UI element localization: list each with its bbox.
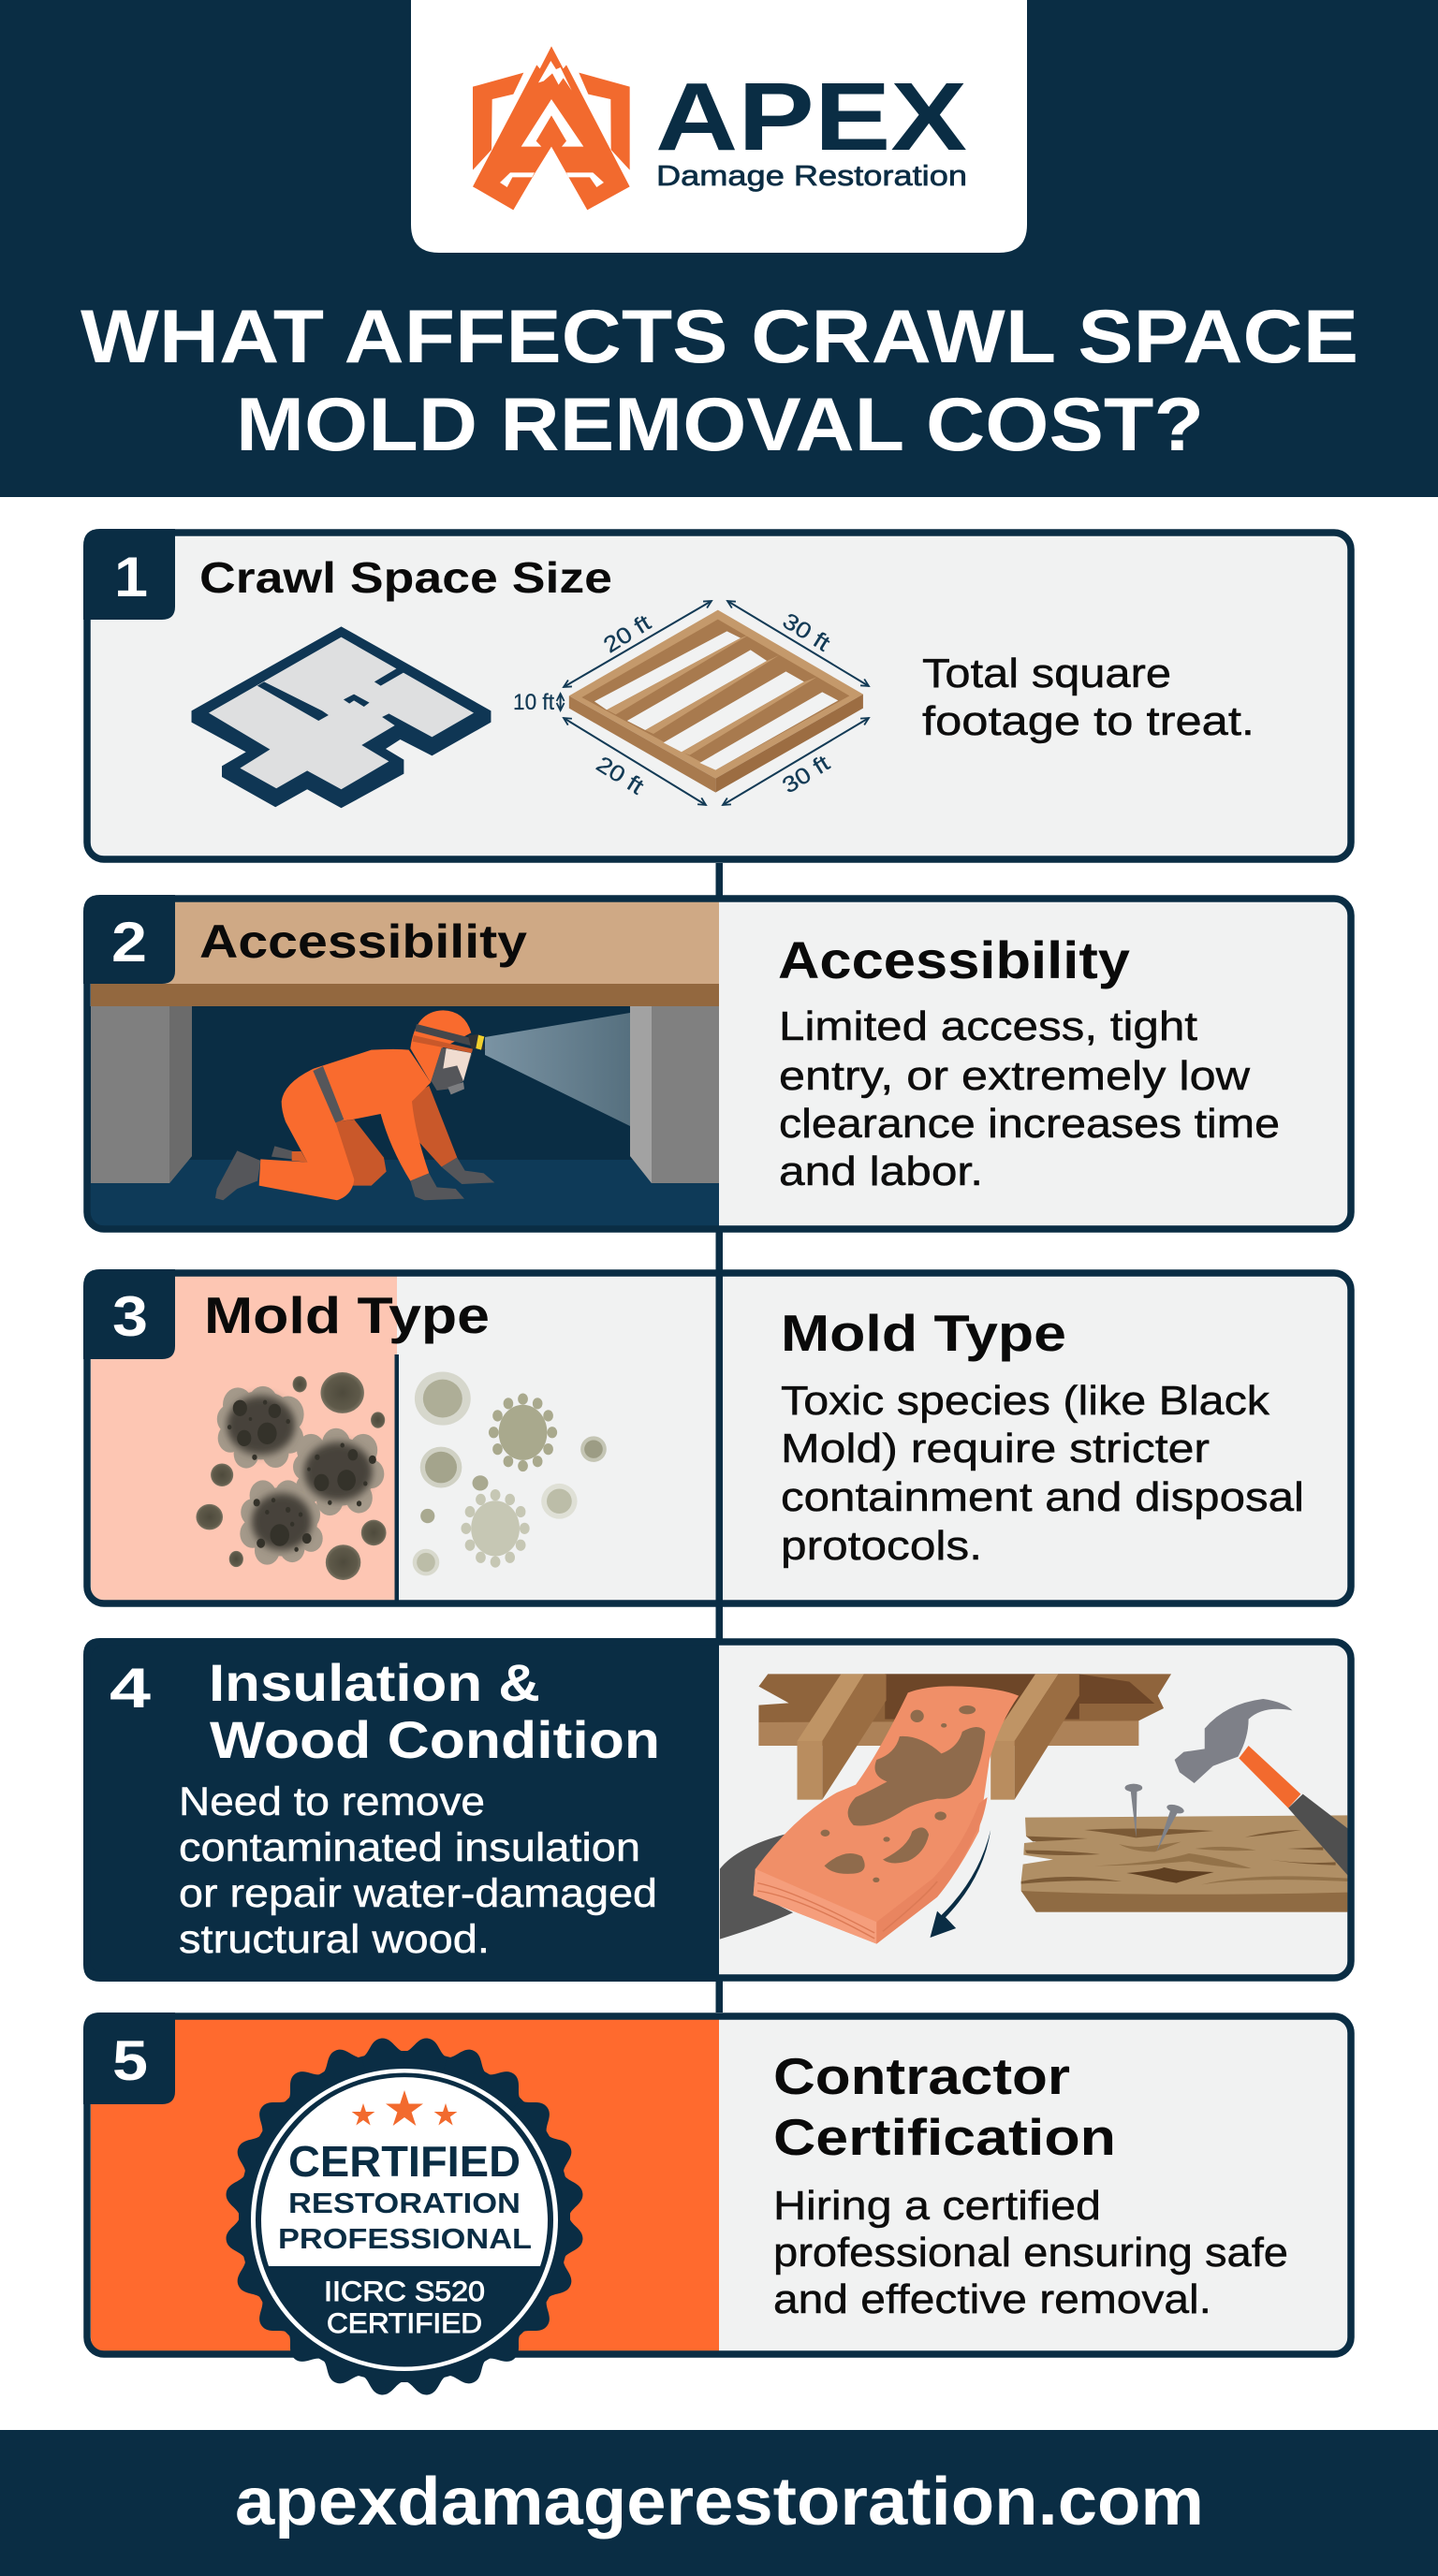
orange background bbox=[91, 2019, 719, 2351]
heading: insulation and wood condition bbox=[209, 1653, 660, 1769]
text: insulation description bbox=[179, 1779, 657, 1962]
badge: certified restoration professional bbox=[203, 2015, 606, 2418]
text: accessibility description: and labor. bbox=[779, 1149, 983, 1194]
heading: crawl space size: Crawl Space Size bbox=[199, 553, 612, 602]
panel: contractor certification bbox=[83, 2012, 1351, 2418]
heading: accessibility: Accessibility bbox=[778, 930, 1130, 989]
title: WHAT AFFECTS CRAWL SPACE bbox=[81, 295, 1358, 379]
number badge 5: 5 bbox=[112, 2029, 148, 2092]
panel: insulation and wood condition bbox=[83, 1638, 1351, 1982]
title: MOLD REMOVAL COST? bbox=[236, 383, 1204, 467]
text: total square footage: Total square bbox=[922, 651, 1171, 696]
timeline connector bbox=[715, 863, 723, 2012]
text: contractor description: professional ensuring safe bbox=[773, 2230, 1288, 2276]
arrow: removal direction bbox=[930, 1830, 990, 1938]
panel: mold type bbox=[83, 1269, 1351, 1603]
number badge 5 bbox=[83, 2012, 175, 2104]
dimension arrows and labels: 30 ft bbox=[778, 751, 834, 798]
number badge 3 bbox=[83, 1269, 175, 1359]
dimension arrows and labels: 20 ft bbox=[599, 610, 655, 658]
icon: apex logo mark bbox=[473, 46, 630, 210]
dimension arrows and labels: 30 ft bbox=[778, 608, 834, 657]
illustration: damaged insulation and ceiling wood bbox=[720, 1674, 1171, 1944]
text: mold type description: containment and disposal bbox=[781, 1474, 1304, 1520]
heading: mold type image label: Mold Type bbox=[204, 1286, 490, 1344]
text: accessibility description: entry, or extremely low bbox=[779, 1053, 1250, 1099]
illustration: crawl space scene bbox=[87, 901, 719, 1229]
dimension arrows and labels: 20 ft bbox=[592, 752, 648, 800]
number 4: 4 bbox=[110, 1657, 152, 1720]
heading: contractor certification: Certification bbox=[773, 2108, 1116, 2166]
text: insulation description: contaminated insulation bbox=[179, 1825, 640, 1870]
badge: certified restoration professional: IICRC S520 bbox=[324, 2276, 485, 2307]
text: contractor description: and effective removal. bbox=[773, 2276, 1211, 2322]
text: insulation description: or repair water-damaged bbox=[179, 1871, 657, 1916]
logo panel bbox=[411, 0, 1027, 253]
text: accessibility description: Limited access, tight bbox=[779, 1003, 1197, 1049]
card outline bbox=[87, 899, 1351, 1229]
logo wordmark: APEX bbox=[655, 63, 967, 170]
nails bbox=[1124, 1784, 1186, 1852]
heading: contractor certification bbox=[773, 2047, 1116, 2166]
number badge 2 bbox=[83, 895, 175, 984]
illustration: crawling worker bbox=[215, 1010, 494, 1200]
dimension arrows and labels bbox=[513, 601, 869, 805]
badge: certified restoration professional: RESTORATION bbox=[288, 2187, 521, 2219]
text: accessibility description bbox=[779, 1003, 1280, 1194]
card outline bbox=[87, 2016, 1351, 2354]
illustration: black mold colonies bbox=[196, 1372, 387, 1580]
text: mold type description: protocols. bbox=[781, 1523, 982, 1569]
glove bbox=[720, 1834, 793, 1939]
text: mold type description: Toxic species (like Black bbox=[781, 1378, 1270, 1424]
text: mold type description: Mold) require stricter bbox=[781, 1426, 1210, 1471]
right pier bbox=[630, 1006, 719, 1183]
badge: certified restoration professional: PROFESSIONAL bbox=[278, 2222, 532, 2255]
text: total square footage bbox=[922, 651, 1255, 744]
number badge 1: 1 bbox=[114, 546, 148, 608]
divider line bbox=[395, 1354, 399, 1603]
text: insulation description: Need to remove bbox=[179, 1779, 485, 1824]
left pier bbox=[91, 1006, 192, 1183]
footer band bbox=[0, 2430, 1438, 2576]
header band bbox=[0, 0, 1438, 497]
heading: accessibility image label: Accessibility bbox=[199, 915, 527, 968]
illustration: other mold spores bbox=[413, 1372, 607, 1575]
heading: contractor certification: Contractor bbox=[773, 2047, 1070, 2105]
text: total square footage: footage to treat. bbox=[922, 698, 1255, 744]
illustration: nails and hammer bbox=[1124, 1699, 1347, 1875]
logo tagline: Damage Restoration bbox=[656, 159, 967, 192]
panel: crawl space size bbox=[83, 529, 1351, 859]
heading: insulation and wood condition: Wood Condition bbox=[210, 1710, 660, 1769]
card outline bbox=[87, 1273, 1351, 1603]
navy text block background bbox=[83, 1638, 719, 1982]
hammer bbox=[1175, 1699, 1347, 1875]
text: mold type description bbox=[781, 1378, 1304, 1569]
wood beam bbox=[758, 1674, 1171, 1746]
joists bbox=[798, 1674, 1079, 1800]
pink toxic mold background bbox=[91, 1276, 397, 1601]
heading: mold type: Mold Type bbox=[781, 1304, 1066, 1362]
icon: floor plan bbox=[192, 626, 491, 808]
heading: insulation and wood condition: Insulation & bbox=[209, 1653, 540, 1712]
text: accessibility description: clearance increases time bbox=[779, 1101, 1280, 1147]
number badge 1 bbox=[83, 529, 175, 620]
website url: apexdamagerestoration.com bbox=[235, 2465, 1204, 2539]
badge: certified restoration professional: CERTIFIED bbox=[327, 2308, 482, 2339]
headlamp beam bbox=[485, 1013, 630, 1126]
text: contractor description: Hiring a certified bbox=[773, 2183, 1101, 2229]
number badge 2: 2 bbox=[111, 911, 147, 973]
title bbox=[81, 295, 1358, 467]
insulation batt bbox=[754, 1686, 1019, 1944]
illustration: damaged plank bbox=[1021, 1815, 1347, 1912]
stars bbox=[352, 2090, 457, 2126]
number badge 3: 3 bbox=[112, 1285, 148, 1348]
text: contractor description bbox=[773, 2183, 1288, 2322]
text: insulation description: structural wood. bbox=[179, 1917, 490, 1962]
badge: certified restoration professional: CERTIFIED bbox=[288, 2137, 521, 2186]
dimension arrows and labels: 10 ft bbox=[513, 690, 554, 715]
icon: wooden floor frame bbox=[569, 610, 863, 793]
panel: accessibility bbox=[83, 895, 1351, 1229]
card outline bbox=[87, 1642, 1351, 1978]
